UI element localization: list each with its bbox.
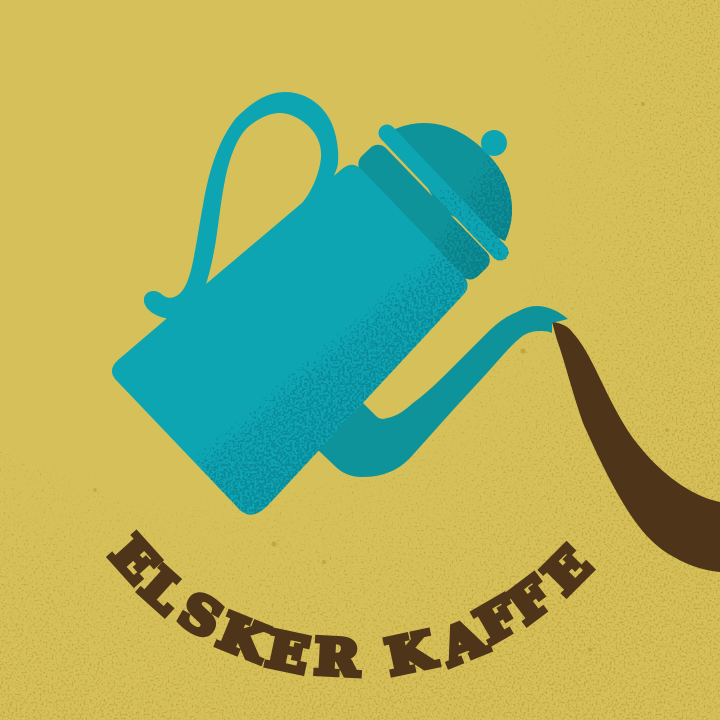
curved title: ELSKER KAFFE: F bbox=[467, 587, 529, 655]
curved title: ELSKER KAFFE: E bbox=[99, 526, 169, 594]
curved title: ELSKER KAFFE: R bbox=[313, 629, 362, 688]
curved title: ELSKER KAFFE: S bbox=[169, 582, 231, 651]
lid shading grain bbox=[434, 156, 512, 280]
curved title: ELSKER KAFFE: A bbox=[432, 609, 495, 678]
pot body bbox=[112, 165, 468, 515]
pot body shading grain bbox=[193, 251, 468, 515]
curved title: ELSKER KAFFE bbox=[99, 526, 603, 688]
lid band grain bbox=[440, 190, 512, 262]
spout bbox=[318, 306, 568, 477]
handle bbox=[144, 92, 350, 330]
curved title: ELSKER KAFFE: K bbox=[210, 603, 277, 674]
lid knob bbox=[481, 130, 507, 156]
curved title: ELSKER KAFFE: L bbox=[129, 557, 195, 625]
curved title: ELSKER KAFFE: F bbox=[498, 567, 563, 635]
lid dome bbox=[395, 123, 512, 241]
lid collar bbox=[354, 140, 494, 284]
curved title: ELSKER KAFFE: E bbox=[533, 536, 603, 606]
curved title: ELSKER KAFFE: K bbox=[381, 621, 441, 687]
curved title: ELSKER KAFFE: E bbox=[262, 621, 314, 685]
background specks bbox=[93, 102, 669, 652]
coffee stream bbox=[552, 322, 720, 572]
lid thin band bbox=[387, 133, 500, 252]
